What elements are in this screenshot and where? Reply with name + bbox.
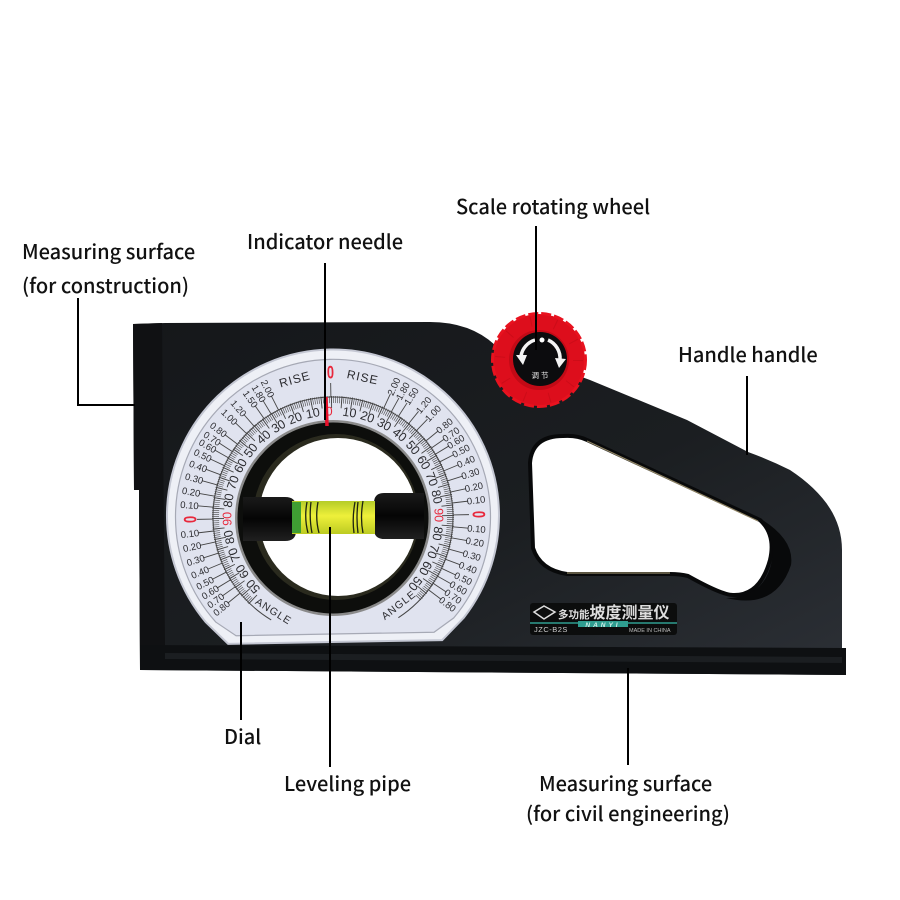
RISE and ANGLE words <box>249 366 419 628</box>
rise scale labels, left side: 0.10 <box>180 500 199 512</box>
rail highlight <box>165 656 842 660</box>
rise scale labels, right side: 0.30 <box>461 549 482 564</box>
rise scale labels, left side: 0.60 <box>200 583 221 602</box>
rise scale labels, right side: 0.70 <box>441 425 462 445</box>
brand band <box>578 621 628 627</box>
instrument body <box>133 322 846 675</box>
rise scale labels, right side: 0.70 <box>442 587 463 607</box>
rise scale labels, left side: 0.30 <box>185 553 206 569</box>
rise scale labels, left side: 0.50 <box>195 575 216 593</box>
rise scale labels, right side: 0.10 <box>467 523 486 536</box>
dial plate <box>164 347 501 645</box>
dial inner face <box>173 357 493 637</box>
dial scale arcs and ticks <box>211 395 455 621</box>
rise scale labels, left side: 0.70 <box>201 430 223 449</box>
angle degree labels: 50 <box>243 576 263 596</box>
label: leveling pipe: Leveling pipe <box>284 768 411 797</box>
angle degree labels: 10 <box>342 405 358 421</box>
rise scale labels, left side: 1.20 <box>228 398 248 419</box>
black centre cap <box>513 332 567 386</box>
rise scale labels, left side: 0.80 <box>211 599 233 619</box>
red zero and ninety marks: 0 <box>326 404 333 418</box>
handle opening right shadow <box>726 516 791 601</box>
angle degree labels: 30 <box>269 417 288 436</box>
bottom rail <box>140 645 846 675</box>
rise scale labels, left side: 0.50 <box>192 447 213 465</box>
angle degree labels: 80 <box>221 492 237 508</box>
rise scale labels, left side: 2.00 <box>258 378 276 400</box>
rise scale labels, left side: 1.50 <box>240 389 260 410</box>
rise scale labels, right side: 0.80 <box>436 595 458 615</box>
brand logo <box>534 606 555 619</box>
left raised strip <box>133 323 165 670</box>
scale rotating wheel <box>492 314 586 406</box>
right cylinder mount <box>374 493 424 539</box>
RISE and ANGLE words: ANGLE <box>379 588 419 623</box>
angle degree labels: 60 <box>416 559 435 578</box>
angle degree labels: 40 <box>390 425 409 445</box>
angle degree labels: 40 <box>254 427 274 447</box>
rise scale labels, right side: 2.00 <box>386 376 403 398</box>
rise scale labels, left side: 1.00 <box>218 407 239 428</box>
rise scale labels, right side: 0.20 <box>464 481 484 495</box>
indicator needle <box>326 397 327 426</box>
handle opening tan edge <box>567 441 758 573</box>
angle degree labels: 20 <box>286 409 304 427</box>
label: indicator needle: Indicator needle <box>247 226 403 255</box>
brand name: NANYI <box>585 622 621 629</box>
angle degree labels: 70 <box>423 470 441 488</box>
rise scale labels, left side: 1.80 <box>249 383 268 405</box>
rise scale labels, right side: 1.80 <box>394 381 413 402</box>
origin text: MADE IN CHINA <box>629 628 671 634</box>
leveling pipe <box>243 493 424 541</box>
red zero and ninety marks: 0 <box>468 511 488 518</box>
product name: 多功能坡度测量仪 <box>558 603 670 622</box>
rise scale labels, right side: 0.10 <box>466 494 486 508</box>
RISE and ANGLE words: RISE <box>346 367 380 387</box>
rise scale labels, left side: 0.20 <box>181 486 201 500</box>
red zero and ninety marks: 90 <box>220 512 235 526</box>
rise scale labels, right side: 1.20 <box>414 395 434 416</box>
angle degree labels: 60 <box>231 456 250 475</box>
label: measuring surface for civil engineering: Measuring surface <box>539 768 712 797</box>
central viewing window <box>235 420 431 616</box>
left cylinder mount <box>243 497 296 541</box>
rise scale labels, left side <box>177 378 280 620</box>
label: measuring surface for construction: Measuring surface <box>22 236 195 265</box>
red zero and ninety marks: 0 <box>327 363 334 383</box>
angle degree labels <box>219 403 446 597</box>
rise tick marks <box>195 381 470 604</box>
model number: JZC-B2S <box>534 625 568 634</box>
rise scale labels, right side: 0.40 <box>456 454 477 471</box>
angle degree labels: 50 <box>403 438 423 458</box>
rise scale labels, right side: 0.50 <box>452 570 474 588</box>
white direction arrows <box>521 340 560 360</box>
rise scale labels, right side: 0.60 <box>445 433 467 452</box>
red zero and ninety marks <box>179 361 488 527</box>
rise scale labels, right side: 0.30 <box>460 466 481 483</box>
rise scale labels, right side: 0.50 <box>451 443 472 461</box>
rise scale labels, right side: 0.60 <box>447 579 469 598</box>
red knurled ring <box>493 314 585 406</box>
rise scale labels, right side: 0.40 <box>457 560 478 577</box>
angle degree labels: 80 <box>221 529 238 545</box>
angle degree labels: 70 <box>225 546 243 564</box>
angle degree labels: 20 <box>359 408 376 426</box>
rise scale labels, right side <box>385 375 488 616</box>
angle degree labels: 50 <box>405 574 425 593</box>
red zero and ninety marks: 0 <box>181 515 201 523</box>
angle degree labels: 30 <box>375 415 394 434</box>
handle opening bevel <box>530 436 772 595</box>
rise scale labels, left side: 0.20 <box>182 540 203 555</box>
angle degree labels: 70 <box>224 474 242 491</box>
angle degree labels: 80 <box>428 489 445 505</box>
rise scale labels, left side: 0.40 <box>187 459 209 476</box>
rise scale labels, right side: 0.20 <box>465 536 485 550</box>
dial <box>164 347 501 645</box>
rise scale labels, left side: 0.70 <box>206 591 227 611</box>
RISE and ANGLE words: RISE <box>278 368 312 390</box>
label: measuring surface for civil engineering: (for civil engineering) <box>526 798 730 827</box>
rise scale labels, left side: 0.30 <box>184 472 204 487</box>
wheel caption: 调 节 <box>531 371 549 380</box>
angle degree labels: 10 <box>305 405 321 422</box>
angle degree labels: 60 <box>233 562 252 581</box>
yellow vial <box>292 501 375 534</box>
angle degree labels: 60 <box>414 453 433 472</box>
rise scale labels, left side: 0.60 <box>197 437 218 456</box>
label: scale rotating wheel: Scale rotating wheel <box>456 191 650 220</box>
label: dial: Dial <box>224 721 261 750</box>
leader lines <box>78 226 747 767</box>
rise scale labels, right side: 0.80 <box>434 416 456 437</box>
angle degree labels: 70 <box>424 543 442 560</box>
label: handle: Handle handle <box>678 339 818 368</box>
arrow heads <box>516 355 566 368</box>
product nameplate <box>530 603 677 635</box>
red zero and ninety marks: 90 <box>431 508 446 522</box>
rise scale labels, left side: 0.10 <box>180 528 200 541</box>
angle degree labels: 80 <box>429 526 445 542</box>
rise scale labels, left side: 0.80 <box>207 420 229 440</box>
centre dot <box>540 338 544 342</box>
rise scale labels, left side: 0.40 <box>190 564 211 582</box>
label: measuring surface for construction: (for construction) <box>22 270 189 299</box>
RISE and ANGLE words: ANGLE <box>253 596 294 627</box>
rise scale labels, right side: 1.00 <box>423 404 444 424</box>
rise scale labels, right side: 1.50 <box>402 386 422 407</box>
teal stripe <box>530 622 677 624</box>
angle degree labels: 50 <box>241 441 261 460</box>
